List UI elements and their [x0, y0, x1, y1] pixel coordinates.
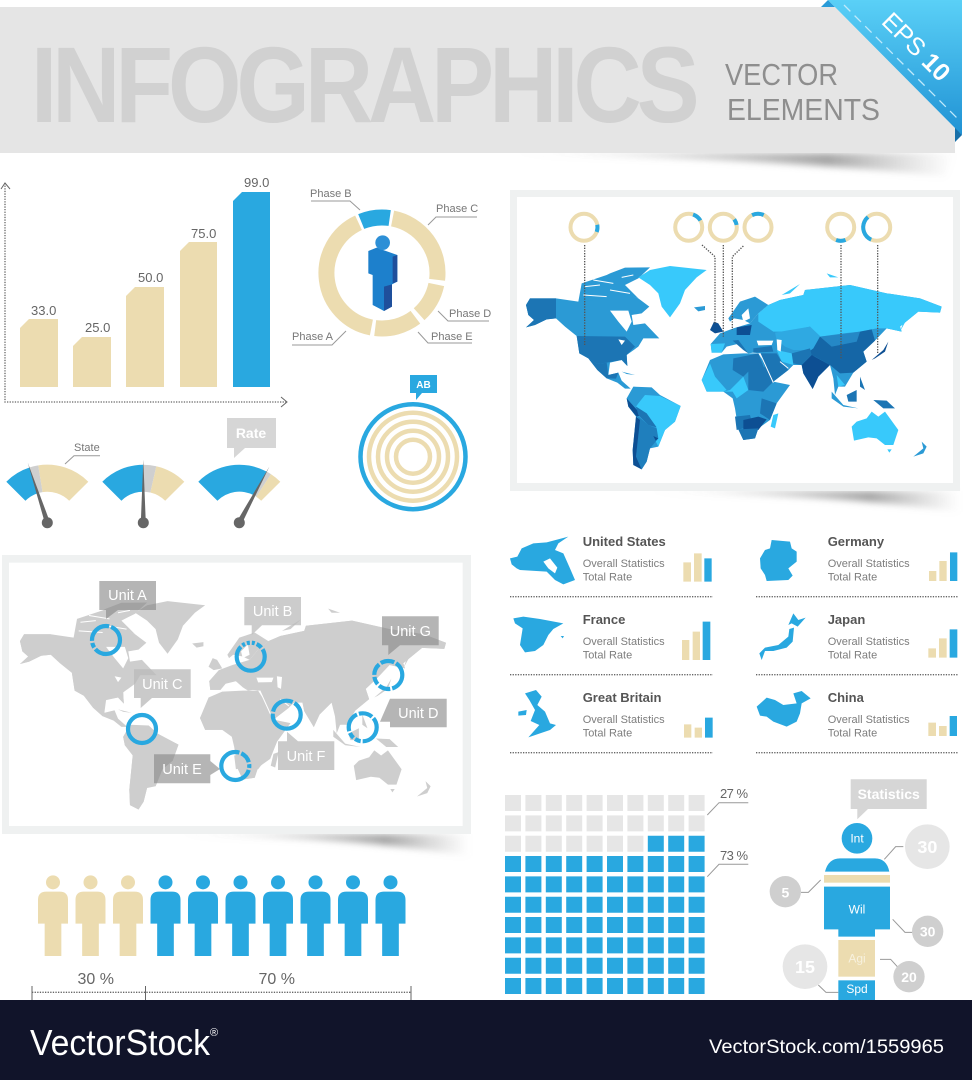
Japan row: Overall Statistics: [828, 636, 910, 648]
phase labels: [292, 188, 491, 345]
Great Britain row: Total Rate: [583, 728, 632, 740]
concentric target: [360, 375, 466, 509]
unit E callout: Unit E: [162, 762, 202, 778]
panel: country statistics: [510, 534, 958, 753]
unit D callout: [380, 699, 447, 727]
gauge 3: [198, 465, 280, 528]
footer bar: [0, 1000, 972, 1080]
China row: China: [828, 690, 865, 705]
United States row: Total Rate: [583, 572, 632, 584]
figure body: 30: [917, 837, 937, 857]
France row: France: [583, 612, 625, 627]
China row: Total Rate: [828, 728, 877, 740]
Germany row: [828, 534, 910, 584]
United States row: [583, 534, 666, 584]
mini bar charts: [682, 552, 957, 738]
unit B callout: [244, 597, 301, 635]
icon: isometric person: [368, 235, 397, 311]
subtitle: vector elements: VECTOR: [725, 57, 838, 92]
unit B callout: Unit B: [253, 604, 292, 620]
figure body: Spd: [846, 982, 868, 996]
bar chart: 33.0: [31, 303, 56, 318]
France row: Total Rate: [583, 650, 632, 662]
percentage scale: 70 %: [258, 971, 295, 988]
waffle labels: 73 %: [720, 848, 748, 863]
statistics figure: [770, 779, 950, 1000]
footer bar: ®: [210, 1027, 218, 1039]
United States row: Overall Statistics: [583, 558, 665, 570]
percentage scale: [32, 971, 411, 1000]
unit rings: [92, 626, 402, 780]
Japan row: Japan: [828, 612, 865, 627]
footer bar: VectorStock: [30, 1022, 211, 1063]
Great Britain row: Great Britain: [583, 690, 662, 705]
bar chart: 75.0: [191, 226, 216, 241]
title: infographics: INFOGRAPHICS: [31, 24, 696, 145]
figure body: Agi: [848, 952, 866, 966]
bar chart: 25.0: [85, 320, 110, 335]
unit F callout: Unit F: [287, 749, 325, 765]
unit G callout: [382, 616, 439, 655]
phase labels: Phase E: [431, 331, 473, 343]
unit C callout: Unit C: [142, 677, 182, 693]
Great Britain row: Overall Statistics: [583, 714, 665, 726]
waffle labels: 27 %: [720, 786, 748, 801]
small ring charts: [568, 208, 895, 246]
footer bar: VectorStock.com/1559965: [709, 1037, 944, 1058]
rate callout: Rate: [236, 425, 266, 441]
China row: Overall Statistics: [828, 714, 910, 726]
unit D callout: Unit D: [398, 706, 438, 722]
panel: blue world map: [510, 190, 960, 512]
unit F callout: [278, 732, 334, 770]
France row: Overall Statistics: [583, 636, 665, 648]
header banner: [0, 0, 962, 176]
phase labels: Phase B: [310, 188, 352, 200]
waffle labels: [707, 786, 748, 877]
world map choropleth: [526, 266, 942, 469]
figure body: 5: [781, 884, 789, 900]
state label: State: [74, 442, 100, 454]
AB tag: AB: [416, 380, 431, 391]
phase labels: Phase C: [436, 203, 478, 215]
figure body: 30: [920, 924, 936, 940]
gauge 2: [102, 460, 184, 528]
bar chart: 99.0: [244, 175, 269, 190]
Germany row: Overall Statistics: [828, 558, 910, 570]
country shapes: [510, 537, 811, 737]
figure body: 20: [901, 969, 917, 985]
United States row: United States: [583, 534, 666, 549]
waffle chart: [505, 786, 748, 994]
state label: [65, 442, 100, 464]
panel: gray world map: [2, 555, 471, 856]
statistics callout: Statistics: [858, 786, 920, 802]
figure body: 15: [795, 957, 815, 977]
Germany row: Germany: [828, 534, 885, 549]
statistics callout: [851, 779, 927, 819]
rate callout: [227, 418, 276, 458]
gauge 1: [6, 463, 88, 528]
Germany row: Total Rate: [828, 572, 877, 584]
Great Britain row: [583, 690, 665, 740]
gray world silhouette: [20, 601, 446, 810]
phase labels: Phase D: [449, 308, 491, 320]
Japan row: [828, 612, 910, 662]
subtitle: vector elements: ELEMENTS: [727, 92, 880, 127]
Japan row: Total Rate: [828, 650, 877, 662]
ribbon: EPS 10: [821, 0, 962, 142]
bar chart: [1, 175, 287, 407]
unit A callout: [99, 581, 156, 619]
subtitle: vector elements: [725, 57, 880, 127]
France row: [583, 612, 665, 662]
ribbon: EPS 10: EPS 10: [876, 7, 956, 87]
figure body: Int: [850, 832, 864, 846]
unit E callout: [154, 754, 220, 783]
map leader lines: [585, 245, 878, 358]
unit G callout: Unit G: [390, 624, 431, 640]
figure body: [770, 823, 950, 1000]
unit C callout: [134, 669, 191, 708]
people pictogram: [38, 875, 405, 956]
China row: [828, 690, 910, 740]
unit A callout: Unit A: [108, 588, 147, 604]
percentage scale: 30 %: [77, 971, 114, 988]
donut with person icon: [292, 188, 491, 345]
figure body: Wil: [849, 903, 865, 917]
phase labels: Phase A: [292, 331, 334, 343]
bar chart: 50.0: [138, 270, 163, 285]
